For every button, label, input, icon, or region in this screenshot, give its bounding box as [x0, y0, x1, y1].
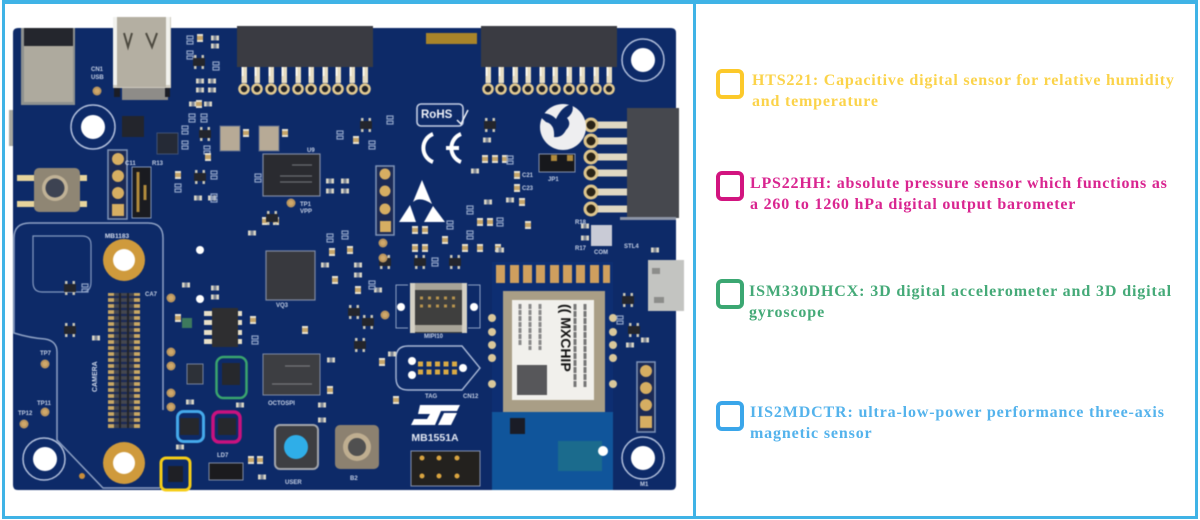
pin header CN: [108, 150, 127, 219]
small chip: [157, 133, 178, 154]
silkscreen component labels: OCTOSPI: [268, 401, 295, 407]
legend text HTS221: [752, 72, 1175, 110]
user button B3: [275, 425, 318, 469]
RGB LED: [591, 225, 612, 246]
silkscreen component labels: CA7: [145, 292, 158, 298]
highlight: LPS22HH sensor: [213, 412, 240, 442]
silkscreen component labels: COM: [594, 250, 608, 256]
silkscreen component labels: C11: [125, 161, 136, 167]
silkscreen component labels: CN1: [91, 67, 104, 73]
arduino header left: [237, 26, 373, 94]
legend text IIS2MDCTR: magnetic sensor: [750, 425, 873, 442]
silkscreen component labels: CN12: [463, 394, 479, 400]
silkscreen camera module outline: [14, 223, 163, 488]
silkscreen component labels: [18, 67, 649, 488]
silkscreen component labels: LD7: [217, 453, 229, 459]
silkscreen component labels: U9: [307, 148, 315, 154]
RoHS mark: [417, 104, 468, 126]
legend text IIS2MDCTR: IIS2MDCTR: ultra-low-power performance three-axis: [750, 404, 1165, 421]
green LED: [182, 318, 192, 328]
silkscreen component labels: M1: [640, 482, 649, 488]
arduino header right: [481, 26, 617, 94]
silkscreen component labels: R18: [575, 220, 587, 226]
RoHS mark: RoHS: [421, 109, 453, 121]
MIPI10 connector: [396, 283, 480, 333]
gold mounting hole lower: [103, 442, 145, 484]
micro USB connector: [648, 260, 684, 311]
gold mounting hole upper: [103, 239, 145, 281]
regulator chip: [122, 116, 144, 137]
legend text HTS221: HTS221: Capacitive digital sensor for relative humidity: [752, 72, 1175, 89]
board outline: [13, 28, 676, 490]
CE mark: [423, 134, 461, 162]
silkscreen component labels: C21: [522, 173, 534, 179]
WiFi module MXCHIP: (( MXCHIP: [558, 304, 574, 372]
STM32 butterfly logo: [536, 104, 586, 150]
silkscreen component labels: TAG: [425, 394, 438, 400]
silkscreen component labels: JP1: [548, 177, 559, 183]
legend text LPS22HH: LPS22HH: absolute pressure sensor which functions as: [750, 175, 1168, 192]
chip VQ: [266, 251, 315, 300]
silkscreen component labels: VQ3: [276, 303, 289, 309]
legend panel: [716, 69, 1175, 442]
right angle connector: [585, 108, 679, 220]
frame: left panel border: [2, 0, 696, 519]
antenna outline inset: [33, 236, 91, 292]
push button B1: [17, 168, 87, 212]
legend text ISM330DHCX: gyroscope: [749, 304, 825, 321]
silkscreen component labels: B2: [350, 476, 358, 482]
silkscreen component labels: R13: [152, 161, 164, 167]
pin header CN11: [637, 362, 655, 432]
silkscreen component labels: TP12: [18, 411, 33, 417]
USB-C connector: [113, 17, 171, 100]
highlight: ISM330DHCX sensor: [216, 357, 246, 398]
highlight: HTS221 sensor: [161, 458, 190, 490]
legend swatch green: [716, 279, 744, 309]
memory chip U8: [263, 354, 320, 395]
surface mount components scatter: [20, 34, 659, 480]
camera connector silkscreen label: CAMERA: [92, 361, 99, 392]
mounting hole top left: [71, 105, 115, 149]
memory chip U9: [263, 154, 320, 196]
legend text LPS22HH: [750, 175, 1168, 213]
silkscreen MB1183 label: MB1183: [105, 233, 129, 240]
mounting hole bottom left: [23, 438, 65, 480]
camera connector: [108, 293, 140, 428]
WiFi module MXCHIP: [488, 262, 617, 490]
silkscreen component labels: STL4: [624, 244, 639, 250]
legend text HTS221: and temperature: [752, 93, 879, 110]
frame: right panel border: [694, 0, 1198, 519]
silkscreen component labels: TP11: [37, 401, 52, 407]
mounting hole top right: [622, 39, 664, 81]
silkscreen component labels: USB: [91, 75, 104, 81]
crystals: [220, 126, 279, 151]
silkscreen component labels: MIPI10: [424, 334, 444, 340]
jumper block: [411, 451, 480, 486]
silkscreen component labels: R17: [575, 246, 587, 252]
jumper P2: [132, 167, 151, 218]
connector CN jumper JP1: [539, 154, 575, 172]
silkscreen component labels: TP1: [300, 202, 312, 208]
legend swatch blue: [716, 401, 744, 431]
legend text ISM330DHCX: [749, 283, 1172, 321]
silkscreen component labels: USER: [285, 480, 302, 486]
TAG connector footprint: [396, 346, 480, 390]
legend text LPS22HH: a 260 to 1260 hPa digital output barometer: [750, 196, 1076, 213]
legend swatch yellow: [716, 69, 744, 99]
ESD warning triangle: [399, 180, 445, 222]
board name: MB1551A: [411, 432, 459, 444]
ST logo: [411, 405, 460, 425]
legend text ISM330DHCX: ISM330DHCX: 3D digital accelerometer and 3D digital: [749, 283, 1172, 300]
small sensor chip: [187, 364, 203, 384]
LED bar: [209, 463, 243, 480]
pin header CN8: [376, 166, 394, 235]
gold pad strip: [426, 33, 477, 44]
highlight: IIS2MDCTR sensor: [178, 412, 204, 442]
mounting hole bottom right: [622, 437, 664, 479]
reset button B2: [335, 425, 379, 469]
shielded module at top left: [9, 28, 75, 146]
silkscreen component labels: VPP: [300, 209, 312, 215]
silkscreen component labels: C23: [522, 186, 534, 192]
legend text IIS2MDCTR: [750, 404, 1165, 442]
silkscreen component labels: TP7: [40, 351, 52, 357]
flash chip SO8: [204, 308, 242, 347]
legend swatch magenta: [716, 171, 744, 201]
